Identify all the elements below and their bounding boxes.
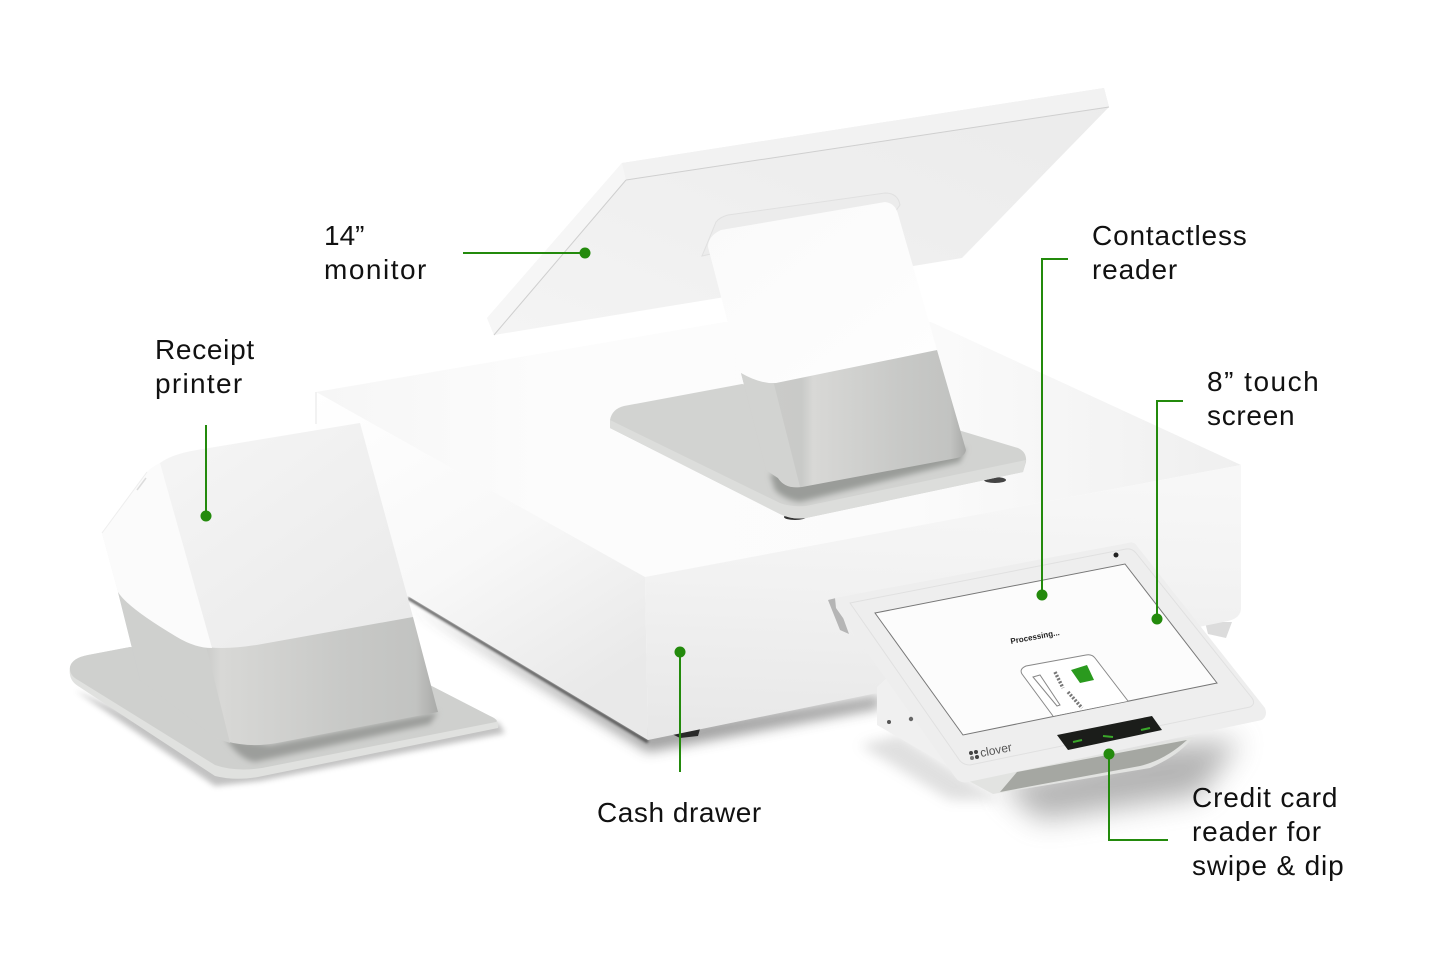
printer metal body	[118, 592, 438, 745]
reader body	[835, 542, 1266, 782]
callout: credit card reader	[1104, 748, 1345, 881]
callout: 8 inch touch screen	[1152, 366, 1320, 624]
callout: receipt printer: Receipt	[155, 334, 255, 365]
callout: credit card reader: Credit card	[1192, 782, 1338, 813]
callout: 8 inch touch screen: screen	[1207, 400, 1295, 431]
monitor base plate	[610, 384, 1026, 520]
callout: contactless reader: reader	[1092, 254, 1178, 285]
callout: contactless reader	[1036, 220, 1248, 600]
printer base plate	[70, 647, 498, 779]
callout: cash drawer: Cash drawer	[597, 797, 762, 828]
callout: receipt printer	[155, 334, 255, 522]
callout: 14 inch monitor: 14”	[324, 220, 364, 251]
cash drawer	[316, 322, 1241, 752]
callout: contactless reader: Contactless	[1092, 220, 1248, 251]
callout: cash drawer	[597, 646, 762, 828]
monitor stand white	[708, 202, 937, 383]
monitor on stand	[487, 88, 1109, 520]
monitor screen back	[487, 88, 1109, 335]
touch screen: Processing...	[1010, 628, 1060, 646]
monitor stand metal	[741, 350, 966, 487]
touch screen	[875, 564, 1217, 735]
callout: 14 inch monitor: monitor	[324, 254, 428, 285]
receipt printer	[70, 423, 505, 786]
callout: receipt printer: printer	[155, 368, 243, 399]
printer white body	[102, 423, 413, 648]
credit card slot	[1057, 716, 1162, 750]
callout: 8 inch touch screen: 8” touch	[1207, 366, 1320, 397]
reader stand	[828, 598, 1193, 794]
callout: credit card reader: swipe & dip	[1192, 850, 1345, 881]
clover logo: clover	[979, 740, 1013, 760]
callout: credit card reader: reader for	[1192, 816, 1322, 847]
callout: 14 inch monitor	[324, 220, 590, 285]
card reader terminal	[828, 542, 1266, 820]
